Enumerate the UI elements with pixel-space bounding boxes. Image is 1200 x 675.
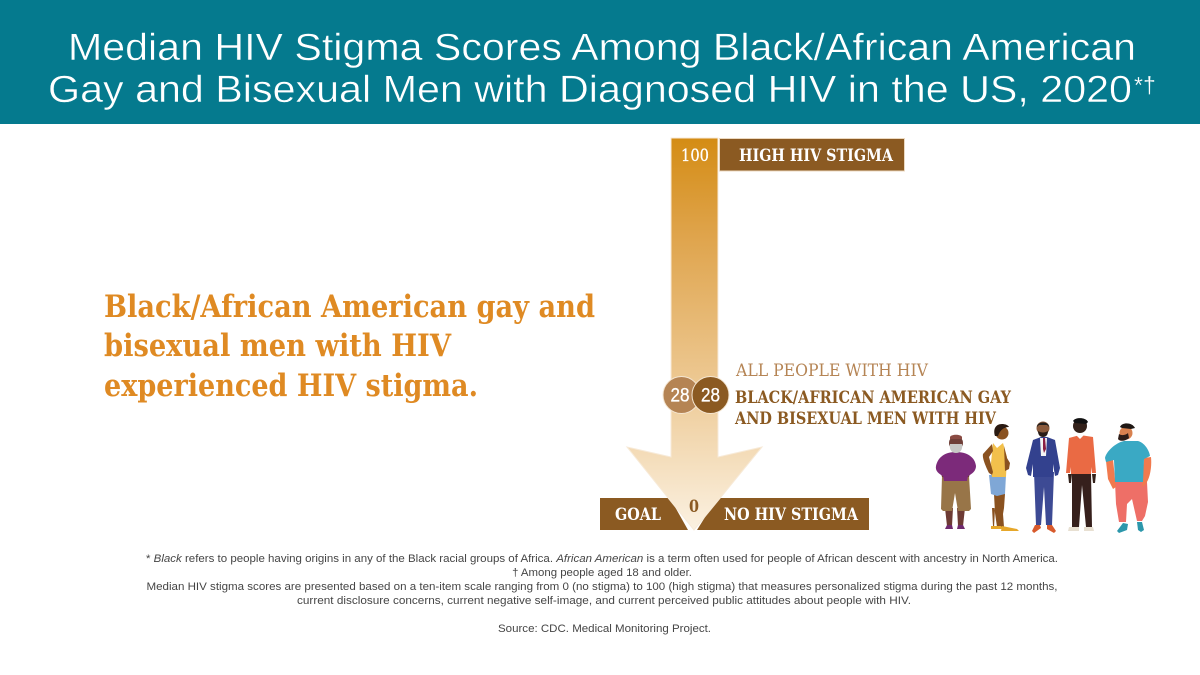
legend label: Black/African American gay and bisexual men with HIV: BLACK/AFRICAN AMERICAN GAY xyxy=(735,388,1012,408)
footnotes: current disclosure concerns, current negative self-image, and current perceived public attitudes about people with HIV. xyxy=(297,595,911,607)
legend label: all people with HIV: ALL PEOPLE WITH HIV xyxy=(735,361,929,381)
score marker: all people with HIV xyxy=(663,376,700,414)
title banner: Gay and Bisexual Men with Diagnosed HIV in the US, 2020 xyxy=(48,69,1132,111)
left statement text: bisexual men with HIV xyxy=(104,328,452,364)
left statement text xyxy=(104,289,595,404)
high stigma label xyxy=(720,138,904,171)
score marker: Black/African American gay and bisexual men xyxy=(692,376,729,414)
title banner: Median HIV Stigma Scores Among Black/African American xyxy=(68,27,1136,69)
title banner xyxy=(0,0,1200,124)
score marker: Black/African American gay and bisexual men: 28 xyxy=(701,386,720,406)
footnotes: † Among people aged 18 and older. xyxy=(512,567,692,579)
scale arrow: 0 xyxy=(689,497,699,517)
goal label bar: GOAL xyxy=(615,505,661,524)
footnotes: Source: CDC. Medical Monitoring Project. xyxy=(498,623,711,635)
footnotes: Median HIV stigma scores are presented based on a ten-item scale ranging from 0 (no stigma) to 100 (high stigma) that measures personalized stigma during the past 12 months, xyxy=(146,581,1058,593)
goal label bar xyxy=(600,498,688,530)
title banner: *† xyxy=(1134,72,1156,98)
man 1: purple shirt xyxy=(936,435,976,529)
footnotes xyxy=(146,553,1058,635)
man 4: orange plaid sweater xyxy=(1066,418,1096,531)
man 3: blue suit xyxy=(1026,422,1060,533)
illustration: five men xyxy=(936,418,1151,533)
scale arrow xyxy=(627,138,762,530)
score marker: all people with HIV: 28 xyxy=(670,386,690,406)
high stigma label: HIGH HIV STIGMA xyxy=(739,146,893,165)
legend label: Black/African American gay and bisexual men with HIV: AND BISEXUAL MEN WITH HIV xyxy=(734,409,997,429)
footnotes: * Black refers to people having origins in any of the Black racial groups of Africa. African American is a term often used for people of African descent with ancestry in North America. xyxy=(146,553,1058,565)
no stigma label bar: NO HIV STIGMA xyxy=(724,505,858,524)
scale arrow: 100 xyxy=(681,146,709,166)
man 2: yellow tank top xyxy=(983,424,1019,531)
left statement text: Black/African American gay and xyxy=(104,289,595,325)
no stigma label bar xyxy=(697,498,869,530)
man 5: teal shirt xyxy=(1105,423,1151,533)
legend label: Black/African American gay and bisexual men with HIV xyxy=(734,388,1012,429)
left statement text: experienced HIV stigma. xyxy=(104,368,478,404)
